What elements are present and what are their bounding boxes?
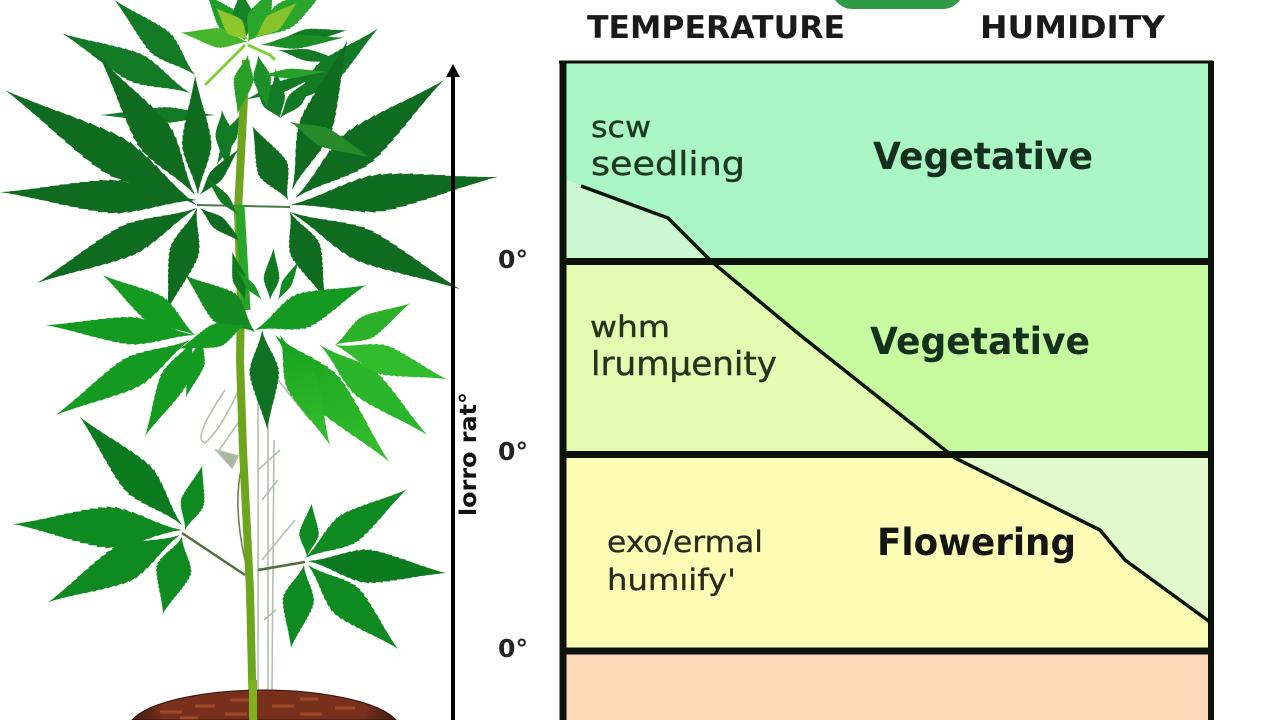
text: scw: scw (591, 110, 651, 144)
upper large leaf, left (0, 47, 247, 315)
panel: vegetative band (563, 262, 1210, 454)
panel: seedling band (563, 62, 1210, 260)
humidity heading: HUMIDITY (980, 10, 1166, 46)
text: exo/ermal: exo/ermal (607, 525, 763, 559)
green pill at top (835, 0, 960, 9)
main stem (238, 60, 253, 720)
stem cluster between upper and middle leaves (202, 173, 304, 310)
temperature heading: TEMPERATURE (587, 10, 845, 46)
panel: bottom band (563, 652, 1210, 720)
text: Vegetative middle: Vegetative (870, 320, 1090, 363)
plant illustration (0, 0, 501, 720)
tick label upper: 0° (498, 245, 528, 274)
stage chart (559, 61, 1213, 720)
upper large leaf, right (238, 34, 501, 305)
top light-green cluster (179, 0, 345, 116)
chart frame and dividers (559, 61, 1213, 720)
panel: flowering band (563, 455, 1210, 650)
text: lrumuenity: lrumμenity (591, 344, 777, 383)
upper back leaves (56, 0, 387, 171)
tick label lower: 0° (498, 634, 528, 663)
text: whim: whm (590, 310, 670, 344)
text: Vegetative upper: Vegetative (873, 135, 1093, 178)
lower right leaf (258, 476, 448, 662)
lower left leaf (12, 404, 245, 619)
middle bright leaf (44, 261, 451, 475)
soil in pot (132, 690, 396, 720)
vertical axis arrow (446, 64, 460, 720)
tick label middle: 0° (498, 437, 528, 466)
text: seedling: seedling (591, 144, 745, 183)
text: Flowering: Flowering (877, 521, 1076, 564)
transition curve (581, 186, 1210, 622)
faint sketch stems behind the main stem (201, 380, 310, 690)
rotated axis label: lorro rat° (456, 392, 482, 516)
stem through soil (249, 680, 257, 720)
petioles of upper leaves (197, 205, 290, 207)
text: humidity: humıify' (607, 563, 736, 597)
